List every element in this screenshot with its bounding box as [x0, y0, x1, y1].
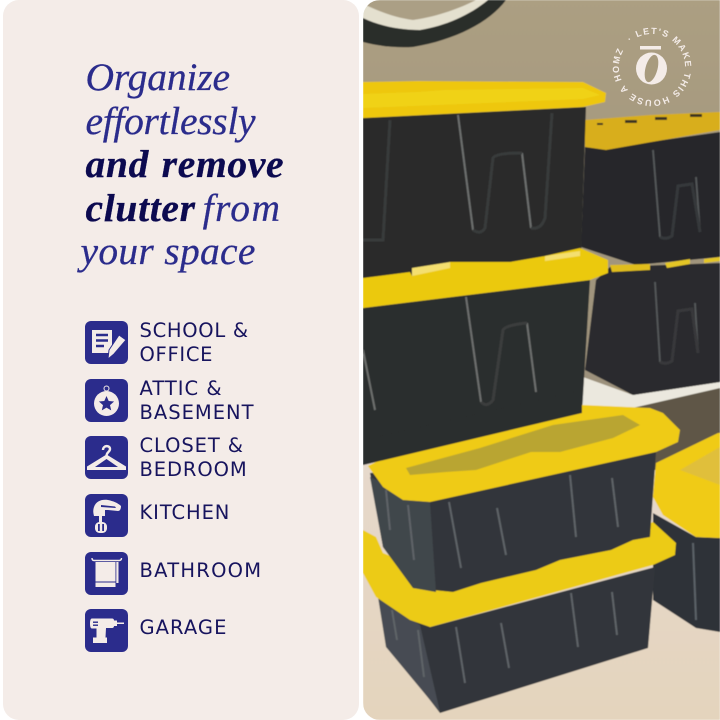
floor [363, 462, 720, 720]
logo circular text [619, 34, 685, 100]
bin: far right [653, 433, 720, 632]
title: Organize [86, 55, 230, 99]
photo: stacked black and yellow storage bins [363, 0, 720, 720]
category: bathroom [85, 552, 262, 595]
bin: bottom [363, 522, 676, 713]
icon: hand mixer [85, 494, 128, 537]
label: BEDROOM [140, 458, 248, 481]
title: clutter from [86, 186, 281, 230]
title: and remove [86, 142, 284, 186]
label: KITCHEN [140, 501, 230, 524]
panel: left background [3, 0, 359, 720]
wall [363, 0, 720, 420]
icon: towel on rail [85, 552, 128, 595]
label [140, 434, 248, 481]
logo badge: · LET'S MAKE THIS HOUSE A HOMZ [612, 28, 692, 106]
category: closet and bedroom [85, 434, 248, 481]
title: effortlessly [86, 98, 255, 142]
category: garage [85, 609, 227, 652]
label [140, 319, 249, 366]
category: school and office [85, 319, 249, 366]
second left bin overlap edge [364, 404, 583, 465]
title [77, 55, 284, 273]
icon: ornament with star [85, 379, 128, 422]
label: BATHROOM [140, 559, 262, 582]
icon: power drill [85, 609, 128, 652]
bin: top left [363, 81, 606, 285]
label: SCHOOL & [140, 319, 249, 342]
icon: notepad and pencil [85, 321, 128, 364]
wall behind shelf [629, 388, 720, 470]
label [140, 377, 255, 424]
category: kitchen [85, 494, 230, 537]
icon: hanger [85, 436, 128, 479]
bin: third [368, 405, 680, 592]
label: GARAGE [140, 616, 227, 639]
label: OFFICE [140, 343, 213, 366]
label: BASEMENT [140, 401, 255, 424]
label: ATTIC & [140, 377, 223, 400]
bin: right upper [581, 112, 720, 265]
bin: second left [363, 248, 608, 465]
shelf [582, 377, 720, 408]
logo mark [636, 46, 667, 84]
bicycle wheel [363, 0, 506, 47]
category: attic and basement [85, 377, 255, 424]
bin: right lower [585, 257, 720, 395]
title: your space [80, 229, 256, 273]
label: CLOSET & [140, 434, 244, 457]
